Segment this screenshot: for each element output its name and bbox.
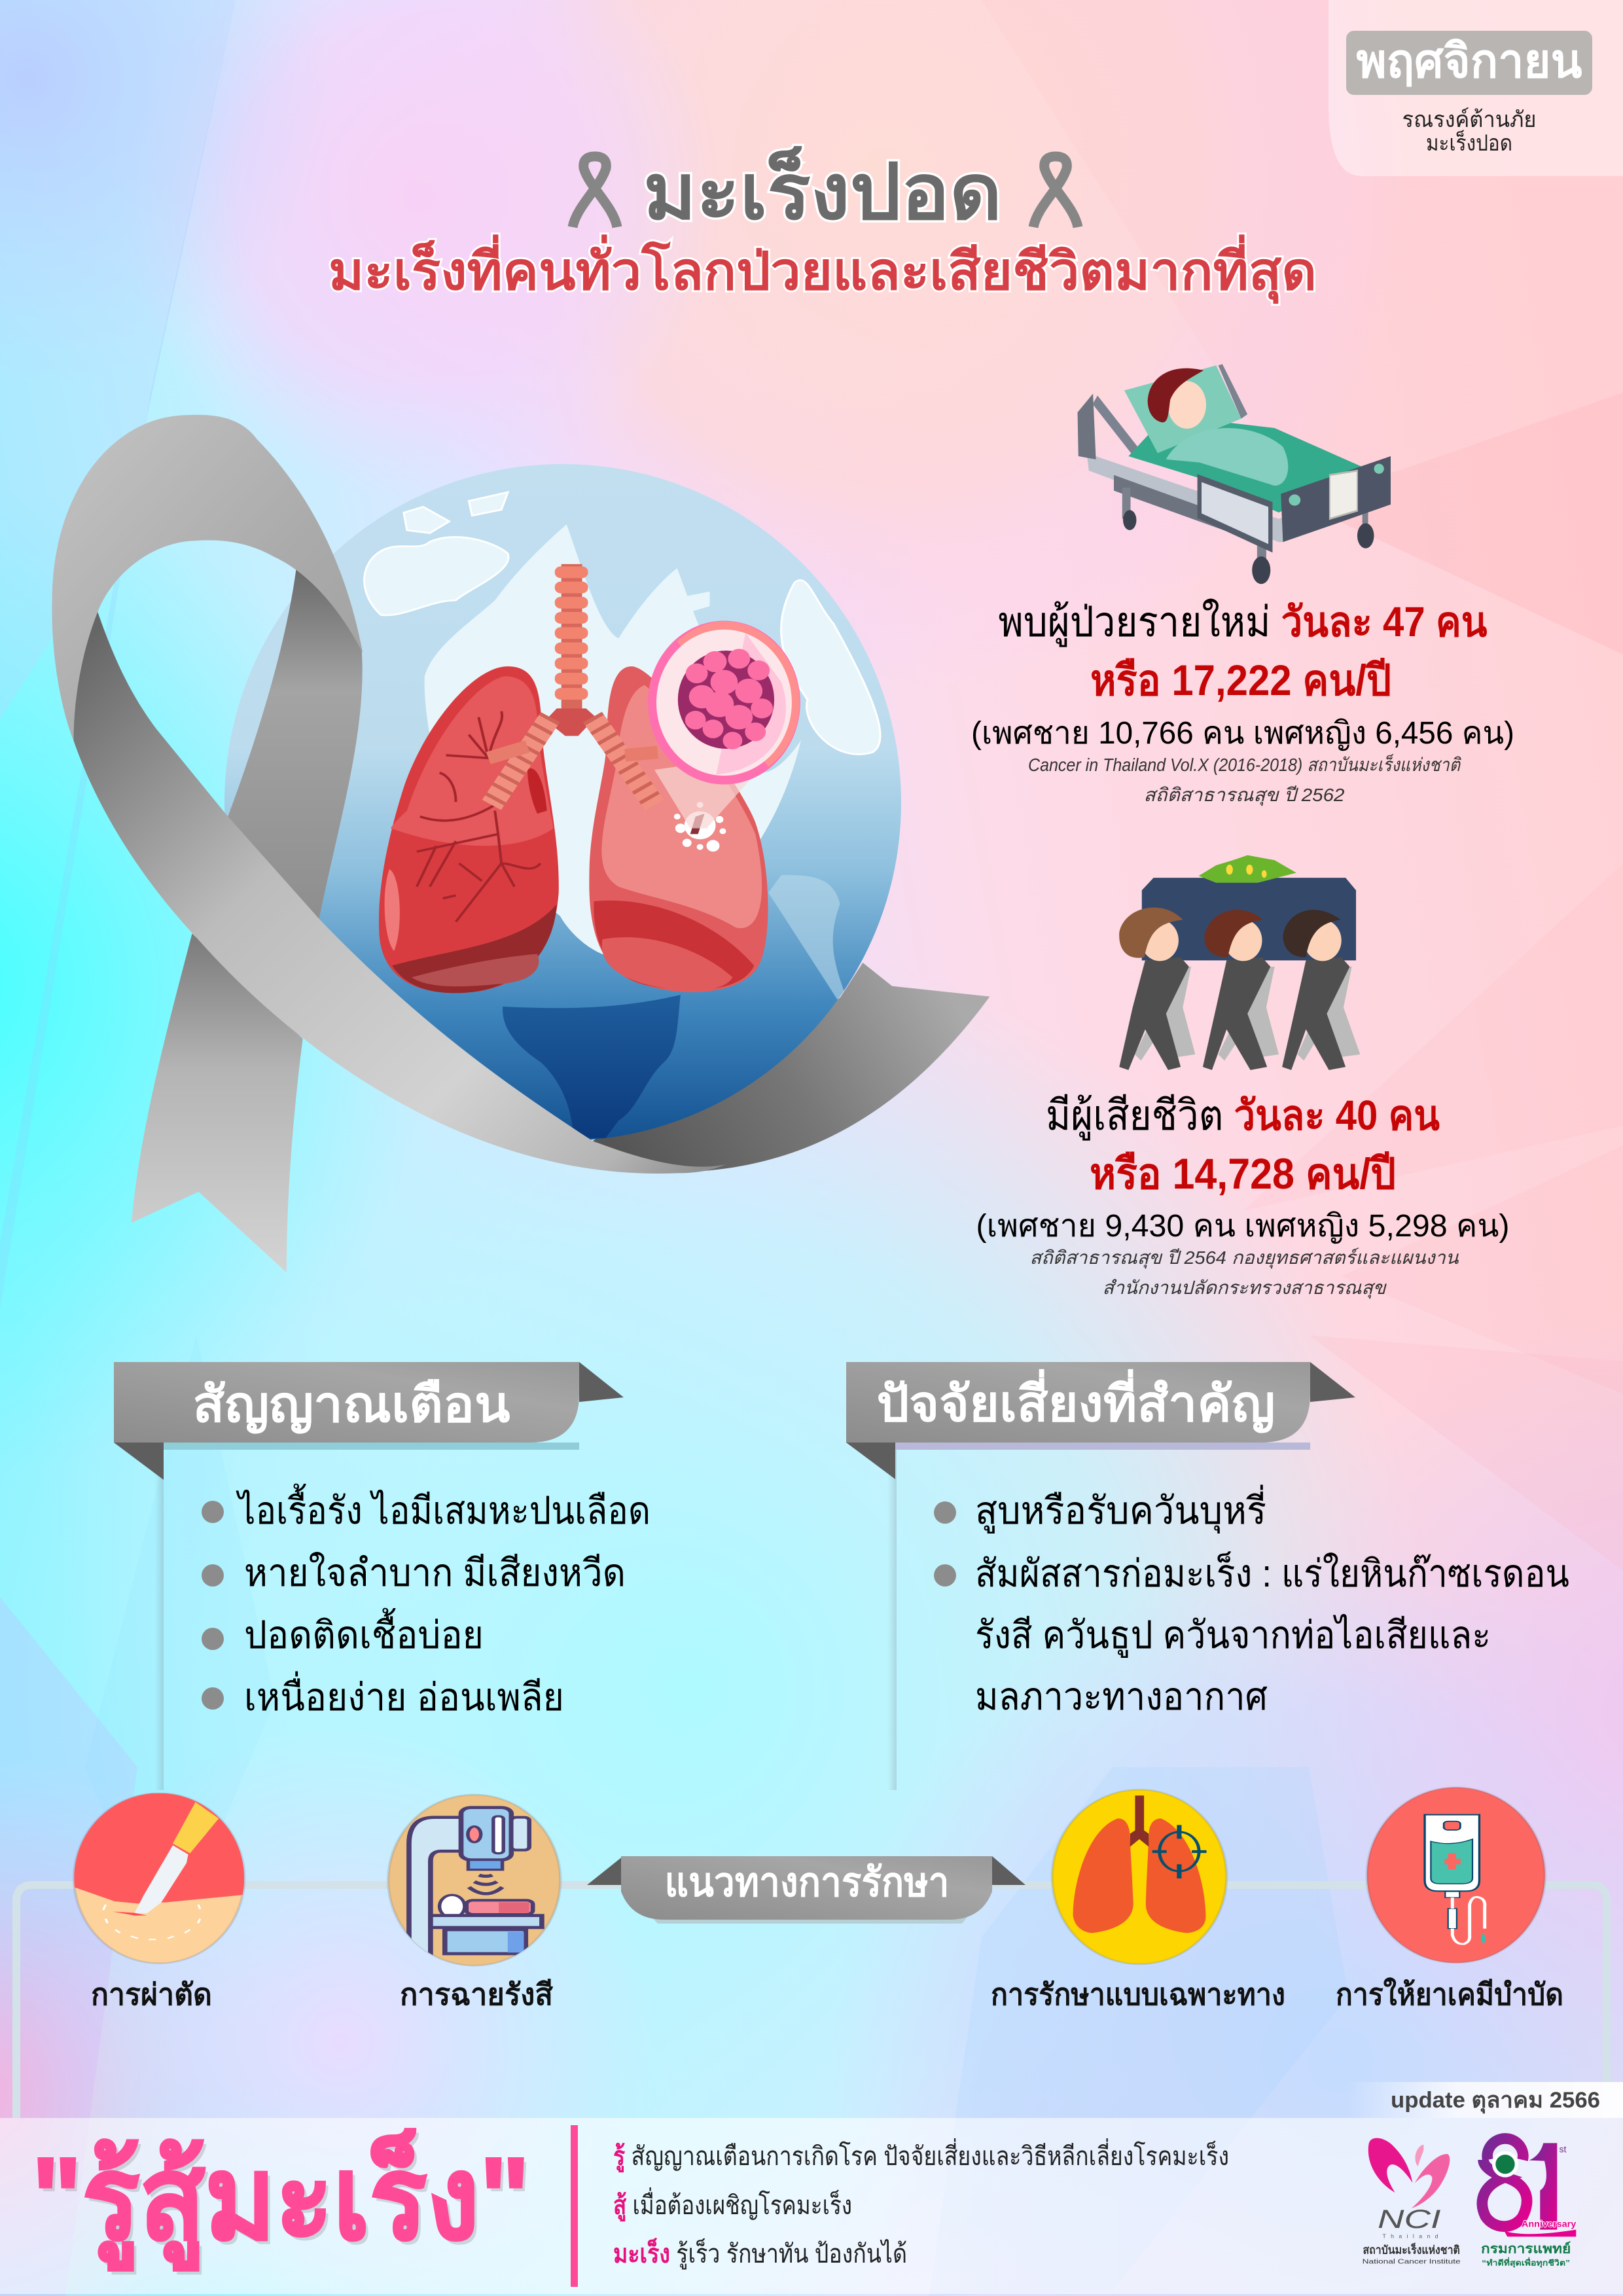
ribbon top loop (52, 415, 363, 741)
ribbon front band (73, 612, 726, 1174)
ribbon left tail (132, 933, 303, 1272)
title ribbon icon left (573, 156, 617, 227)
warning signs list: ไอเรื้อรัง ไอมีเสมหะปนเลือด (236, 1484, 651, 1532)
icon: radiotherapy (388, 1795, 560, 1965)
treatment banner: แนวทางการรักษา (665, 1860, 949, 1905)
blanket (1166, 428, 1288, 486)
icon: surgery (74, 1793, 244, 1964)
treatment banner (587, 1856, 1026, 1924)
icon: chemotherapy (1367, 1787, 1545, 1963)
slogan explanation: มะเร็ง รู้เร็ว รักษาทัน ป้องกันได้ (613, 2237, 907, 2269)
new cases text: Cancer in Thailand Vol.X (2016-2018) สถาบันมะเร็งแห่งชาติ (1028, 754, 1462, 775)
carrier one (1119, 907, 1195, 1070)
risk factors banner: ปัจจัยเสี่ยงที่สำคัญ (877, 1369, 1275, 1433)
slogan explanation: รู้ สัญญาณเตือนการเกิดโรค ปัจจัยเสี่ยงและวิธีหลีกเลี่ยงโรคมะเร็ง (613, 2138, 1229, 2172)
risk factors list: สัมผัสสารก่อมะเร็ง : แร่ใยหินก๊าซเรดอน (975, 1551, 1569, 1595)
month label: พฤศจิกายน (1356, 35, 1582, 88)
new cases text: (เพศชาย 10,766 คน เพศหญิง 6,456 คน) (971, 716, 1514, 751)
carrier three (1282, 910, 1360, 1070)
logo: National Cancer Institute: NCI (1378, 2205, 1441, 2234)
patient head (1168, 381, 1206, 429)
warning signs list: หายใจลำบาก มีเสียงหวีด (244, 1551, 626, 1594)
logo: National Cancer Institute: สถาบันมะเร็งแห่งชาติ (1363, 2242, 1460, 2256)
globe (223, 458, 910, 1145)
risk factors list (934, 1484, 1569, 1718)
illustration: ribbon globe lungs (52, 415, 990, 1272)
month tag panel (1329, 0, 1623, 176)
campaign slogan: "รู้สู้มะเร็ง" (35, 2132, 533, 2275)
treatment labels (91, 1977, 1563, 2011)
carrier two (1203, 910, 1279, 1070)
warning signs list: เหนื่อยง่าย อ่อนเพลีย (244, 1671, 564, 1719)
subtitle: มะเร็งที่คนทั่วโลกป่วยและเสียชีวิตมากที่สุด (329, 234, 1317, 304)
risk factors list: มลภาวะทางอากาศ (975, 1676, 1268, 1718)
flowers (1199, 855, 1296, 883)
deaths text: หรือ 14,728 คน/ปี (1090, 1149, 1396, 1198)
logo: National Cancer Institute: National Cancer Institute (1363, 2259, 1461, 2266)
bed frame (1087, 453, 1389, 542)
treatment labels: การฉายรังสี (400, 1977, 554, 2011)
coffin (1142, 878, 1356, 960)
logo: National Cancer Institute: Thailand (1382, 2233, 1438, 2239)
new cases text: สถิติสาธารณสุข ปี 2562 (1144, 785, 1345, 806)
treatment frame line (16, 1885, 1607, 2118)
update note: update ตุลาคม 2566 (1391, 2088, 1600, 2114)
title ribbon icon right (1033, 156, 1078, 227)
deaths text (976, 1092, 1509, 1299)
logo: National Cancer Institute (1363, 2138, 1461, 2266)
magnifier (648, 620, 800, 828)
icon: targeted therapy (1052, 1789, 1226, 1964)
treatment labels: การรักษาแบบเฉพาะทาง (991, 1977, 1285, 2011)
logo: Department of Medical Services 81st (1481, 2138, 1577, 2269)
mattress (1128, 416, 1366, 512)
risk factors list: รังสี ควันธูป ควันจากท่อไอเสียและ (975, 1613, 1491, 1658)
deaths text: สถิติสาธารณสุข ปี 2564 กองยุทธศาสตร์และแผนงาน (1030, 1247, 1459, 1269)
new cases text (971, 598, 1514, 806)
foot board (1281, 456, 1391, 542)
right lung (589, 666, 768, 992)
campaign text: มะเร็งปอด (1426, 130, 1512, 156)
deaths text: สำนักงานปลัดกระทรวงสาธารณสุข (1102, 1278, 1387, 1299)
logo: Department of Medical Services 81st: “ทำดีที่สุดเพื่อทุกชีวิต” (1482, 2257, 1570, 2269)
trachea (488, 564, 658, 805)
campaign text: รณรงค์ต้านภัย (1402, 107, 1537, 132)
new cases text: พบผู้ป่วยรายใหม่ วันละ 47 คน (999, 598, 1488, 647)
panel: warning signs (114, 1362, 651, 1790)
side rail panel (1200, 478, 1270, 548)
slogan explanation: สู้ เมื่อต้องเผชิญโรคมะเร็ง (613, 2187, 852, 2221)
logo: Department of Medical Services 81st: Anniversary (1522, 2219, 1577, 2229)
campaign text (1402, 107, 1537, 156)
warning signs banner: สัญญาณเตือน (192, 1377, 510, 1434)
update note (1346, 2082, 1623, 2118)
warning signs list (202, 1484, 651, 1719)
campaign slogan: "รู้สู้มะเร็ง" (31, 2128, 530, 2271)
deaths text: (เพศชาย 9,430 คน เพศหญิง 5,298 คน) (976, 1209, 1509, 1244)
lungs (379, 564, 800, 993)
logo: Department of Medical Services 81st: st (1560, 2144, 1567, 2154)
footer strip (0, 2118, 1623, 2294)
divider (571, 2125, 578, 2287)
risk factors banner (846, 1362, 1355, 1479)
deaths text: มีผู้เสียชีวิต วันละ 40 คน (1046, 1092, 1440, 1141)
left lung (379, 666, 559, 993)
new cases text: หรือ 17,222 คน/ปี (1090, 656, 1391, 704)
bronchial tree (417, 711, 541, 922)
treatment labels: การให้ยาเคมีบำบัด (1336, 1977, 1563, 2011)
title: มะเร็งปอด (643, 145, 1002, 236)
risk factors list: สูบหรือรับควันบุหรี่ (975, 1484, 1266, 1534)
coffin carriers illustration (1119, 855, 1360, 1070)
warning signs banner (114, 1362, 624, 1480)
ribbon right tail (592, 963, 990, 1172)
treatment labels: การผ่าตัด (91, 1977, 212, 2011)
logo: Department of Medical Services 81st: กรมการแพทย์ (1481, 2242, 1571, 2257)
panel: risk factors (846, 1362, 1569, 1790)
slogan explanation (613, 2138, 1229, 2269)
ribbon strands (52, 415, 726, 1272)
ribbon back strand (228, 568, 363, 919)
warning signs list: ปอดติดเชื้อบ่อย (244, 1608, 484, 1657)
tumor spot (674, 802, 726, 852)
patient in bed illustration (1078, 364, 1391, 584)
